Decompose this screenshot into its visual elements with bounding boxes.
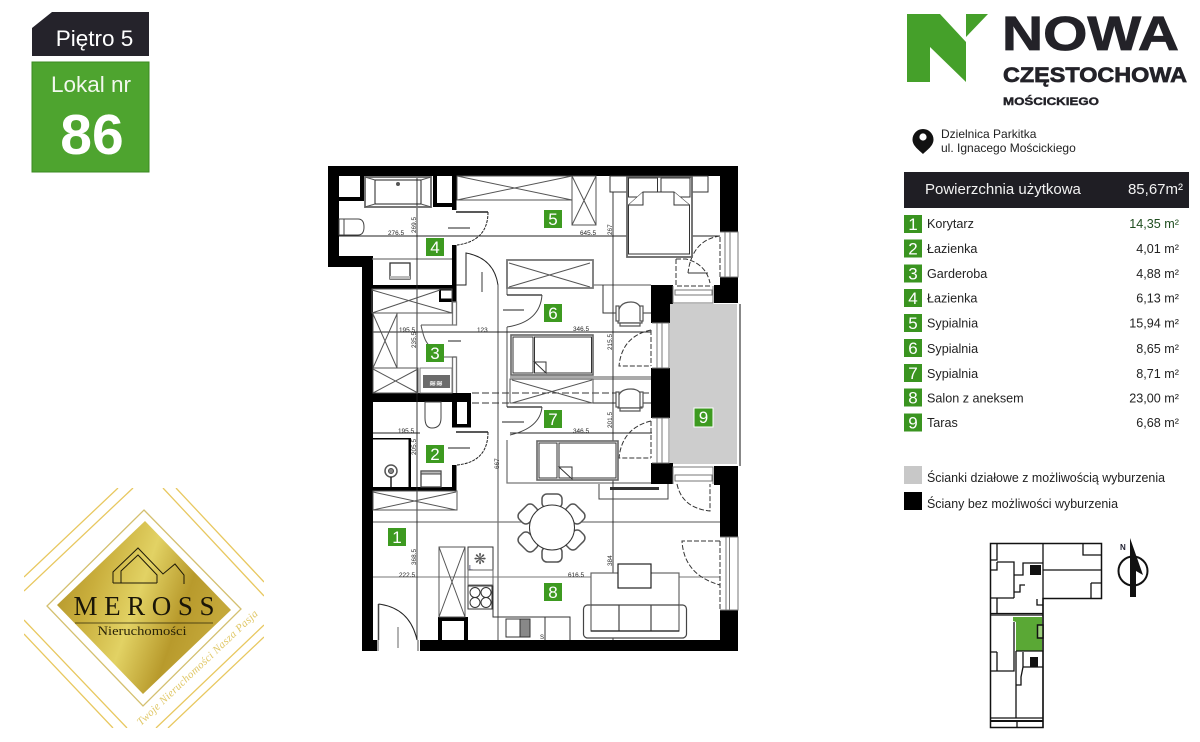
dimension labels: 267 <box>607 224 614 235</box>
washer in wardrobe: ≋≋ <box>429 379 443 388</box>
utility niche in kitchen <box>438 617 468 621</box>
row 7 <box>904 364 1179 383</box>
bathtub <box>365 177 431 207</box>
brand logo: Nowa Częstochowa <box>907 8 1187 108</box>
address with location pin: Dzielnica Parkitka <box>941 127 1037 141</box>
total usable area header <box>904 172 1189 208</box>
toilet <box>425 402 441 428</box>
row 2 <box>904 240 1179 258</box>
brand logo: Meross: MEROSS <box>74 591 214 621</box>
double bed <box>610 176 708 257</box>
brand logo: Meross: Twoje Nieruchomości Nasza Pasja <box>135 608 261 728</box>
row 1: 14,35 m² <box>1129 217 1179 231</box>
bathroom 4 walls <box>360 176 364 201</box>
row 7: Sypialnia <box>927 367 978 381</box>
row 4: 4 <box>908 289 918 308</box>
bathroom 2 fixtures <box>385 402 441 487</box>
dimension labels: 235.5 <box>411 332 418 348</box>
row 9: 9 <box>908 414 918 432</box>
row 5 <box>904 314 1179 333</box>
single bed room 6 <box>511 335 593 375</box>
row 5: Sypialnia <box>927 316 978 330</box>
legend item: fixed walls: Ściany bez możliwości wyburzenia <box>927 496 1118 511</box>
washer in wardrobe <box>420 368 452 393</box>
room number 9: 9 <box>699 408 708 427</box>
row 9: 6,68 m² <box>1136 416 1179 430</box>
brand logo: Meross: Nieruchomości <box>98 623 187 638</box>
row 4 <box>904 289 1179 308</box>
dimension labels: 215.5 <box>607 334 614 350</box>
brand logo: Meross <box>24 488 264 728</box>
kitchen counter: S <box>540 635 544 641</box>
dimension labels: 201.5 <box>607 412 614 428</box>
bathroom 4 fixtures <box>339 177 431 279</box>
row 3: 3 <box>908 264 918 284</box>
desk room 7 <box>616 389 643 411</box>
dimension labels: 205.5 <box>411 439 418 455</box>
dimension labels: 645.5 <box>580 230 596 237</box>
room number 6 <box>544 304 562 323</box>
legend item: removable partitions <box>904 466 1165 485</box>
doors <box>378 212 542 651</box>
partition walls <box>372 259 720 640</box>
row 8: 8 <box>908 388 918 408</box>
unit badge: Lokal nr 86 <box>32 62 149 172</box>
room number 1: 1 <box>392 528 402 547</box>
row 3: Garderoba <box>927 267 987 281</box>
toilet <box>339 219 364 235</box>
row 9: Taras <box>927 416 958 430</box>
icon: location pin <box>912 129 934 154</box>
unit badge: Lokal nr 86: Lokal nr <box>51 72 132 97</box>
address with location pin <box>912 127 1076 155</box>
dimension lines <box>339 176 720 640</box>
dimension labels: 667 <box>494 458 501 469</box>
row 8 <box>904 388 1179 408</box>
console under window <box>599 484 668 499</box>
dimension labels: 346.5 <box>573 326 589 333</box>
row 4: Łazienka <box>927 292 977 306</box>
row 7: 7 <box>908 364 918 383</box>
row 6: 6 <box>908 339 918 358</box>
row 2: Łazienka <box>927 242 977 256</box>
dimension labels: 346.5 <box>573 428 589 435</box>
washbasin <box>390 263 410 279</box>
row 7: 8,71 m² <box>1136 367 1179 381</box>
dimension labels: 276.5 <box>388 230 404 237</box>
single bed room 7 <box>537 441 618 480</box>
room number 4 <box>426 238 444 257</box>
washbasin <box>421 471 441 487</box>
legend <box>904 466 1165 511</box>
row 5: 15,94 m² <box>1129 316 1179 330</box>
legend item: fixed walls <box>904 492 1118 511</box>
logo mark <box>907 14 966 82</box>
unit badge: Lokal nr 86: 86 <box>60 103 124 167</box>
dimension labels: 384 <box>607 555 614 566</box>
dimension labels: 195.5 <box>399 327 415 334</box>
row 6: 8,65 m² <box>1136 342 1179 356</box>
armchair <box>616 302 643 326</box>
dimension labels: 222.5 <box>399 572 415 579</box>
total usable area header: Powierzchnia użytkowa <box>925 181 1082 198</box>
row 1: Korytarz <box>927 217 974 231</box>
room number 2 <box>426 445 444 464</box>
room number 8: 8 <box>548 583 558 602</box>
room number 3: 3 <box>430 344 440 363</box>
row 2: 4,01 m² <box>1136 242 1179 256</box>
room list <box>904 215 1179 432</box>
row 5: 5 <box>908 314 918 333</box>
row 1 <box>904 215 1179 234</box>
room number 5: 5 <box>548 210 558 229</box>
row 6: Sypialnia <box>927 342 978 356</box>
row 2: 2 <box>908 240 918 258</box>
load-bearing walls <box>328 166 738 651</box>
kitchen counter: ❋ <box>474 551 486 568</box>
total usable area header: 85,67m² <box>1128 181 1183 198</box>
windows <box>652 232 738 610</box>
row 8: 23,00 m² <box>1129 392 1179 406</box>
room number 3 <box>426 344 444 363</box>
desk room 6 <box>603 285 651 326</box>
room number 6: 6 <box>548 304 558 323</box>
room number 7 <box>544 410 562 429</box>
icon: north compass <box>1118 538 1148 597</box>
row 3: 4,88 m² <box>1136 267 1179 281</box>
building key plan <box>990 544 1102 728</box>
terrace area <box>670 304 741 466</box>
room number 2: 2 <box>430 445 440 464</box>
room number 7: 7 <box>548 410 558 429</box>
dimension labels <box>388 217 614 579</box>
floor plan <box>328 166 741 651</box>
legend item: removable partitions: Ścianki działowe z możliwością wyburzenia <box>927 470 1165 485</box>
brand logo: Nowa Częstochowa: MOŚCICKIEGO <box>1003 95 1100 108</box>
dimension labels: 195.5 <box>398 428 414 435</box>
icon: north compass: N <box>1120 543 1126 552</box>
shower head <box>385 465 397 477</box>
kitchen counter: L <box>469 565 473 572</box>
room number 4: 4 <box>430 238 440 257</box>
row 6 <box>904 339 1179 358</box>
row 1: 1 <box>908 215 918 234</box>
room number 8 <box>544 583 562 602</box>
dimension labels: 616.5 <box>568 572 584 579</box>
room number 9 <box>694 408 713 427</box>
row 4: 6,13 m² <box>1136 292 1179 306</box>
dimension labels: 269.5 <box>411 217 418 233</box>
row 9 <box>904 414 1179 432</box>
brand logo: Nowa Częstochowa: NOWA <box>1002 8 1179 61</box>
bathroom 2 walls <box>373 393 471 402</box>
brand logo: Nowa Częstochowa: CZĘSTOCHOWA <box>1003 64 1187 87</box>
row 8: Salon z aneksem <box>927 392 1024 406</box>
room number 5 <box>544 210 562 229</box>
dimension labels: 123 <box>477 327 488 334</box>
room number 1 <box>388 528 406 547</box>
dining table <box>516 494 587 562</box>
balcony and window doors <box>619 236 720 610</box>
kitchen counter <box>468 547 570 641</box>
dimension labels: 368.5 <box>411 549 418 565</box>
highlighted unit <box>1013 617 1042 651</box>
wardrobes <box>372 176 596 617</box>
address with location pin: ul. Ignacego Mościckiego <box>941 141 1076 155</box>
dimension labels: 851 <box>541 517 552 524</box>
floor label: Piętro 5 <box>32 12 149 56</box>
sofa <box>584 564 686 638</box>
floor label: Piętro 5: Piętro 5 <box>56 26 133 51</box>
row 3 <box>904 264 1179 284</box>
